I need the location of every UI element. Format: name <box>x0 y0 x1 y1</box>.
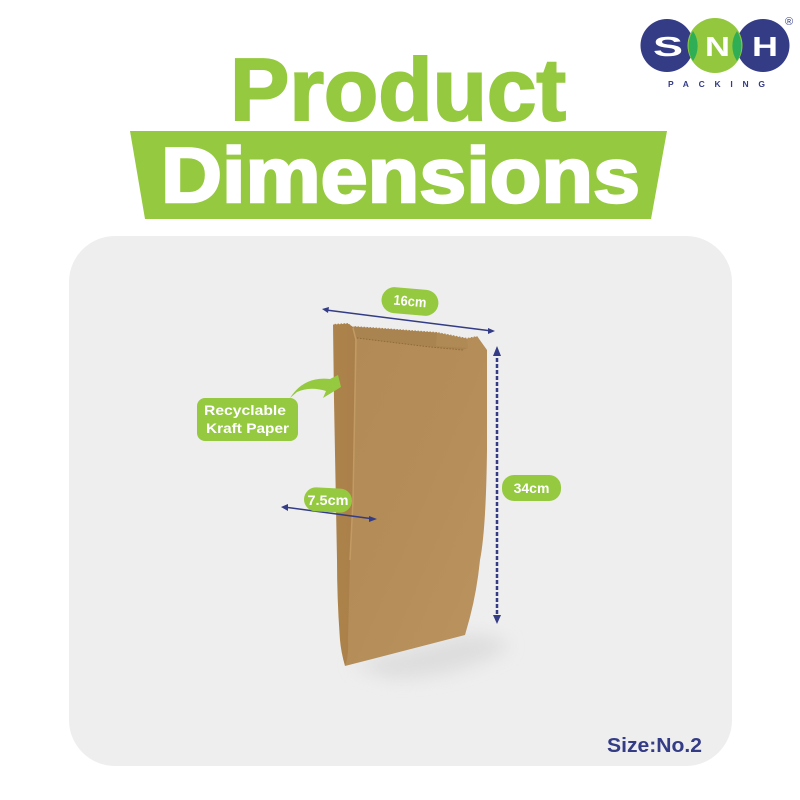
arrow <box>290 375 341 398</box>
kraft paper bag <box>333 323 487 666</box>
title banner: Dimensions: Dimensions <box>161 131 640 219</box>
label: 34cm: 34cm <box>514 480 549 496</box>
bag serrated top edge <box>333 323 477 338</box>
bag fold highlight <box>350 328 356 560</box>
title: Product: Product <box>230 40 566 139</box>
dimension: width 16cm <box>322 286 495 334</box>
label: 16cm <box>380 286 439 317</box>
label: 34cm <box>502 475 561 501</box>
bag shadow <box>350 634 508 678</box>
logo: SNH Packing <box>640 16 793 89</box>
logo: SNH Packing: S <box>653 31 683 62</box>
bag left gusset <box>333 323 358 666</box>
callout: Recyclable Kraft Paper <box>197 375 341 441</box>
callout: Recyclable Kraft Paper: Kraft Paper <box>206 420 290 436</box>
bag inner back panel <box>353 326 486 356</box>
size label: Size:No.2 <box>607 735 702 757</box>
label: 16cm: 16cm <box>393 292 427 310</box>
dimension: depth 7.5cm <box>281 487 377 522</box>
callout: Recyclable Kraft Paper: Recyclable <box>204 402 286 418</box>
logo: SNH Packing: PACKING <box>668 79 765 89</box>
label: 7.5cm: 7.5cm <box>308 492 348 508</box>
panel: product background <box>69 236 732 766</box>
bag front panel <box>345 336 487 666</box>
bag inner lighter right section <box>436 332 468 348</box>
logo: SNH Packing: ® <box>785 16 793 28</box>
dimension: height 34cm <box>493 346 561 624</box>
logo: SNH Packing: N <box>705 31 730 62</box>
logo: SNH Packing: H <box>752 31 778 62</box>
